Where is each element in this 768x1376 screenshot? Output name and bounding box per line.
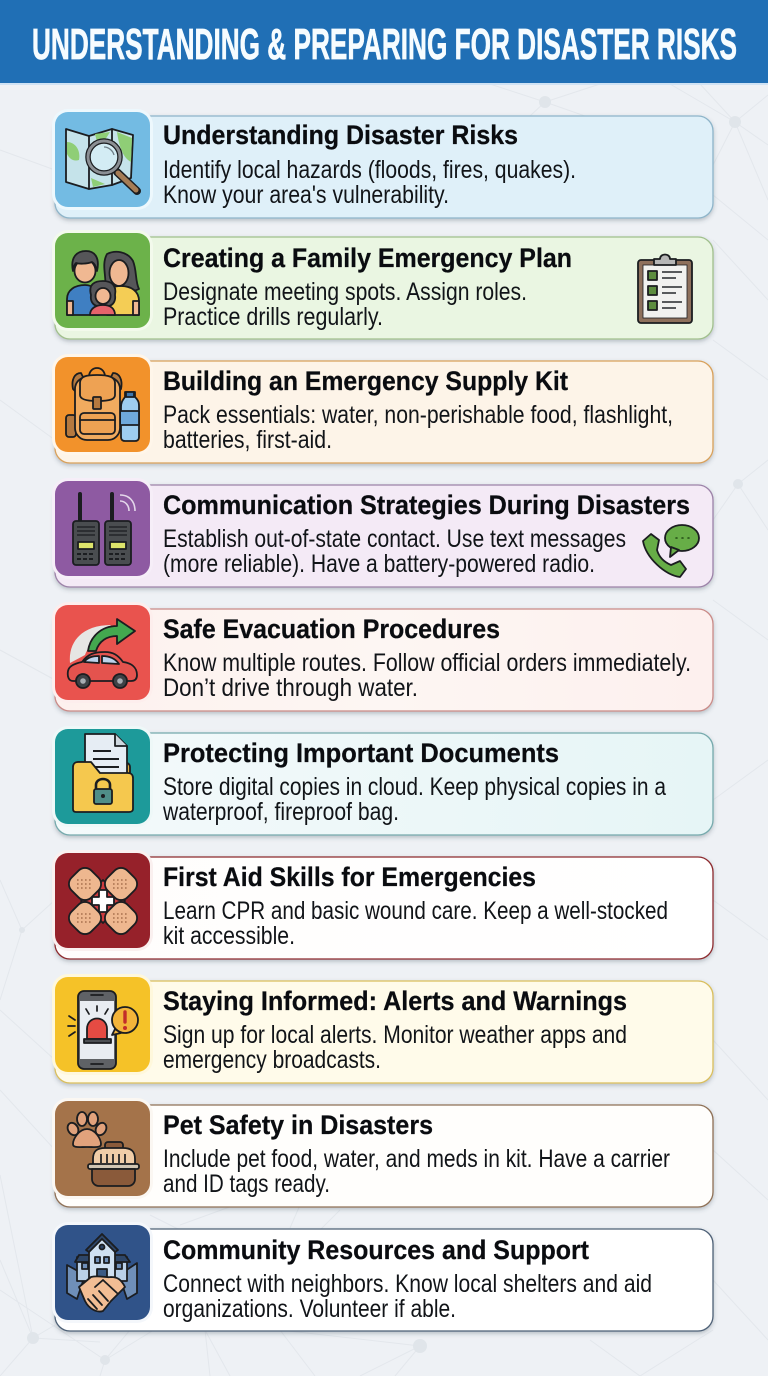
panel: emergency supply kit [52, 354, 713, 463]
body text: Know multiple routes. Follow official orders immediately. [163, 649, 691, 677]
heading: Community Resources and Support [163, 1235, 589, 1265]
panel: understanding disaster risks [52, 109, 713, 218]
body text: Pack essentials: water, non-perishable food, flashlight, [163, 401, 673, 429]
body text [163, 1021, 627, 1074]
icon: walkie talkies [52, 478, 153, 579]
icon: phone with siren [52, 974, 153, 1075]
body text [163, 156, 576, 209]
heading: Safe Evacuation Procedures [163, 614, 500, 644]
body text: waterproof, fireproof bag. [162, 798, 399, 826]
icon: car and arrow [52, 602, 153, 703]
heading: Communication Strategies During Disasters [163, 490, 690, 520]
panel: protecting documents [52, 726, 713, 835]
body text: Store digital copies in cloud. Keep physical copies in a [163, 773, 666, 801]
icon: clipboard checklist [638, 254, 692, 323]
heading: First Aid Skills for Emergencies [163, 862, 536, 892]
body text: Know your area's vulnerability. [163, 181, 449, 209]
icon: map and magnifier [52, 109, 153, 210]
heading: Pet Safety in Disasters [163, 1110, 433, 1140]
icon: building and handshake [52, 1222, 153, 1323]
panel: communication strategies [52, 478, 713, 587]
heading: Understanding Disaster Risks [163, 120, 518, 150]
body text: and ID tags ready. [163, 1170, 330, 1198]
body text: batteries, first-aid. [163, 426, 332, 454]
body text [162, 773, 666, 826]
body text: Practice drills regularly. [163, 303, 383, 331]
icon: backpack and bottle [52, 354, 153, 455]
heading: Creating a Family Emergency Plan [163, 243, 572, 273]
heading: Protecting Important Documents [163, 738, 559, 768]
body text: Designate meeting spots. Assign roles. [163, 278, 527, 306]
body text [163, 525, 626, 578]
body text: emergency broadcasts. [163, 1046, 381, 1074]
panel: safe evacuation [52, 602, 713, 711]
body text: Include pet food, water, and meds in kit. Have a carrier [163, 1145, 670, 1173]
panel: staying informed [52, 974, 713, 1083]
panel: first aid skills [52, 850, 713, 959]
icon: family [52, 230, 153, 331]
body text [163, 401, 673, 454]
header banner [0, 0, 768, 85]
body text [163, 1145, 670, 1198]
icon: phone and chat bubble [643, 525, 699, 577]
body text: Connect with neighbors. Know local shelters and aid [163, 1270, 652, 1298]
icon: paw and pet carrier [52, 1098, 153, 1199]
panel: community resources [52, 1222, 713, 1331]
body text [163, 897, 668, 950]
body text [163, 649, 691, 702]
panel: family emergency plan [52, 230, 713, 339]
body text: (more reliable). Have a battery-powered radio. [163, 550, 595, 578]
body text: kit accessible. [163, 922, 295, 950]
icon: folder with lock [52, 726, 153, 827]
body text: Learn CPR and basic wound care. Keep a well-stocked [163, 897, 668, 925]
body text [163, 1270, 652, 1323]
body text: Sign up for local alerts. Monitor weather apps and [163, 1021, 627, 1049]
icon: crossed bandages [52, 850, 153, 951]
body text: Don’t drive through water. [163, 674, 418, 702]
body text: organizations. Volunteer if able. [163, 1295, 456, 1323]
heading: Building an Emergency Supply Kit [163, 366, 568, 396]
body text [163, 278, 527, 331]
heading: Staying Informed: Alerts and Warnings [163, 986, 627, 1016]
body text: Identify local hazards (floods, fires, quakes). [163, 156, 576, 184]
body text: Establish out-of-state contact. Use text messages [163, 525, 626, 553]
panel: pet safety [52, 1098, 713, 1207]
